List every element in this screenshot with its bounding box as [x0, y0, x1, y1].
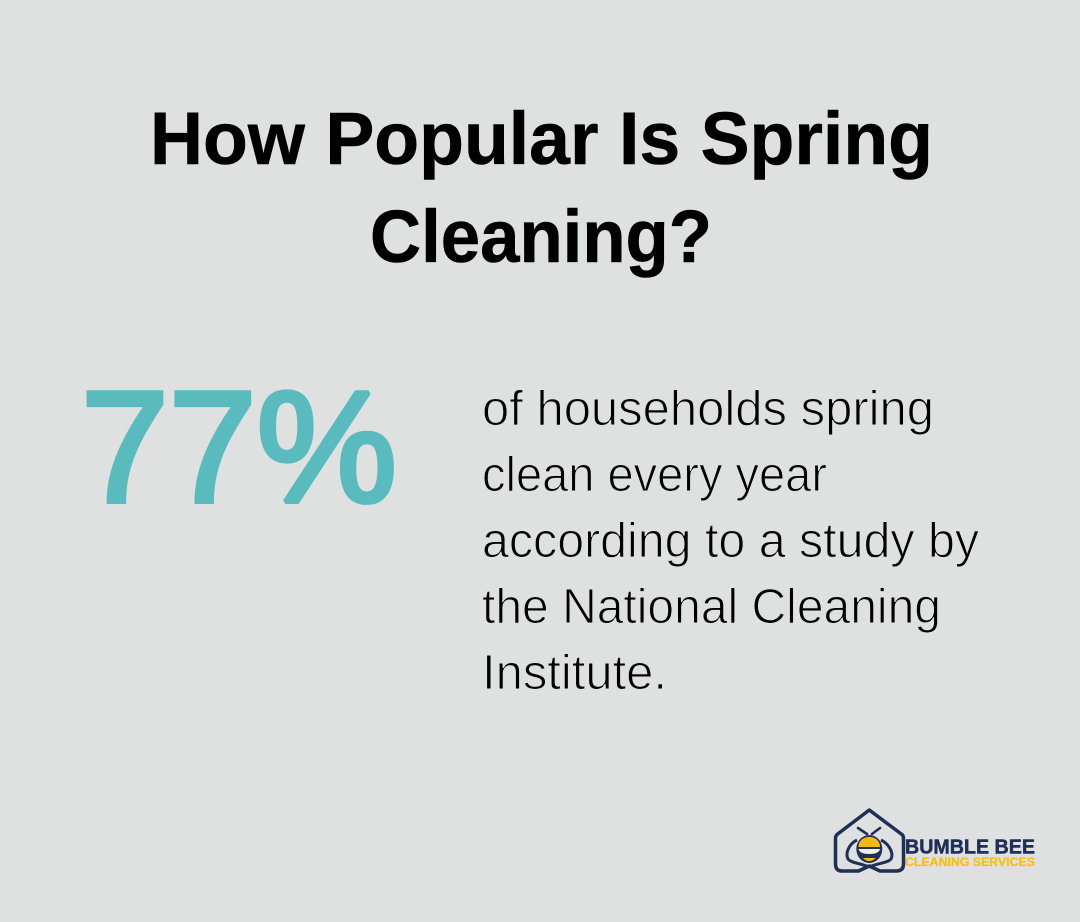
logo tagline: CLEANING SERVICES: [905, 857, 1035, 869]
title: [150, 97, 933, 278]
statistic description: the National Cleaning: [482, 580, 941, 634]
statistic description: [482, 382, 979, 700]
icon: house outline: [836, 810, 904, 871]
icon: bee: [847, 828, 892, 867]
statistic description: according to a study by: [482, 514, 979, 568]
big statistic: 77%: 77%: [81, 360, 397, 536]
statistic description: Institute.: [482, 646, 667, 700]
title: How Popular Is Spring: [150, 97, 933, 180]
statistic description: of households spring: [482, 382, 934, 436]
title: Cleaning?: [370, 195, 712, 278]
logo: Bumble Bee Cleaning Services: [836, 810, 1035, 871]
logo wordmark: BUMBLE BEE: [905, 836, 1035, 858]
statistic description: clean every year: [482, 448, 827, 502]
